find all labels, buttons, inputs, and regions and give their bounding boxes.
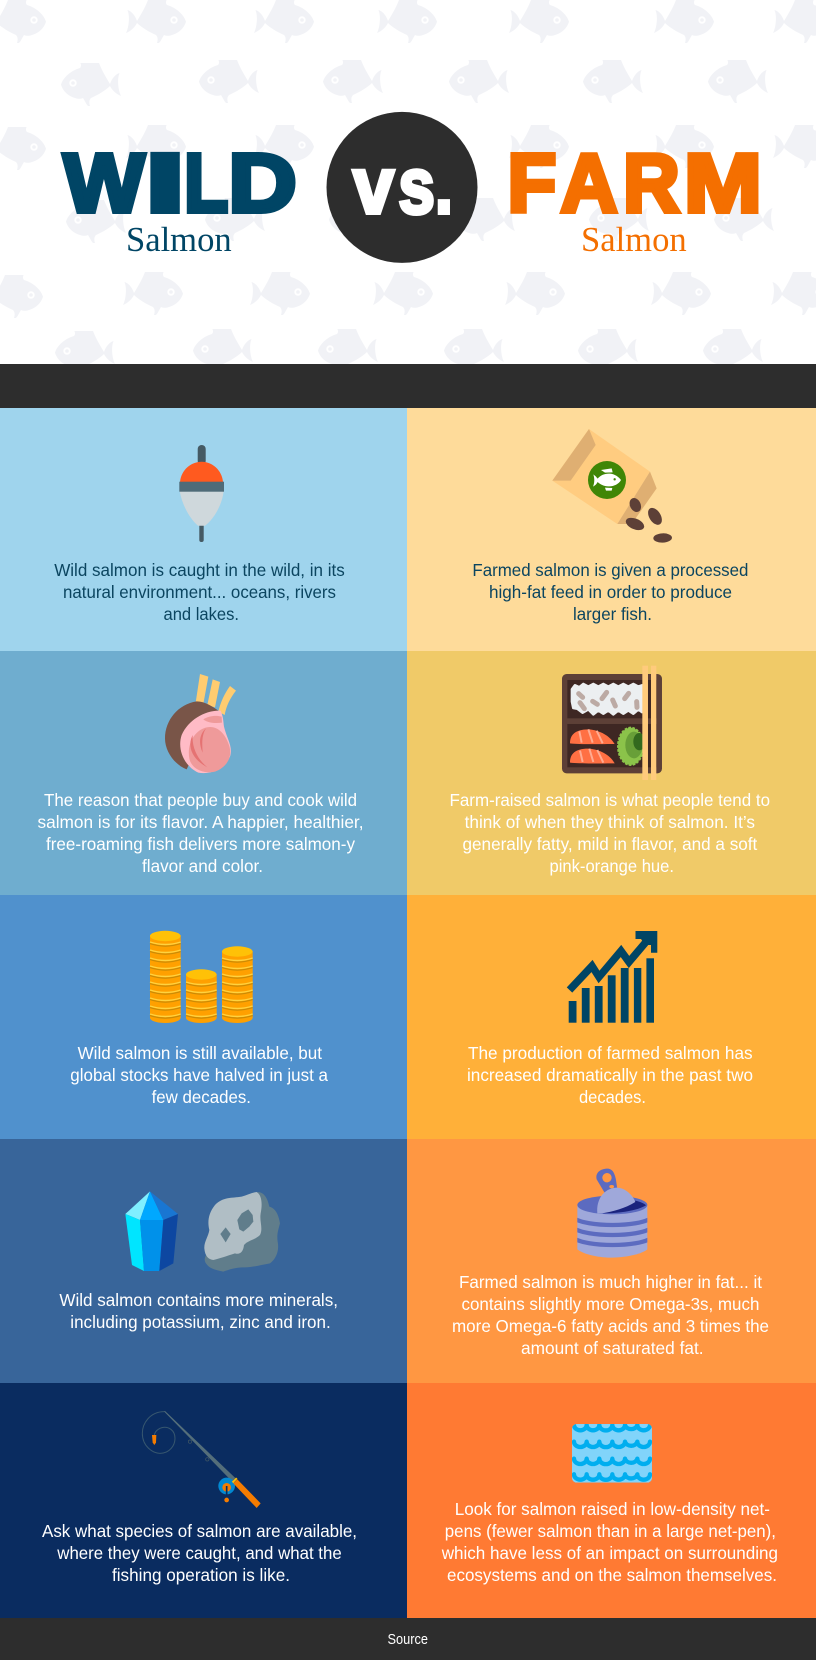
text: farm production [467,1043,753,1107]
footer: source [0,1618,816,1660]
panel: wild minerals [0,1139,407,1383]
panel: wild advice [0,1383,407,1618]
text: wild flavor: flavor and color. [142,856,263,876]
icon: rising bar chart [569,931,657,1023]
panel: wild availability [0,895,407,1139]
icon: coin stacks [150,931,253,1023]
icon: bento box [562,666,662,780]
icon: feed bag [552,429,672,543]
text: farm flavor [450,790,770,876]
text: wild minerals [59,1290,338,1332]
text: farm production: decades. [579,1087,646,1107]
dark header band [0,364,816,408]
panel: farm fat [407,1139,816,1383]
header background with fish pattern [0,0,816,374]
panel: farm production [407,895,816,1139]
panel: farm feed [407,408,816,651]
vs. circle [326,112,478,263]
icon: opened can [573,1169,651,1258]
text: wild minerals: Wild salmon contains more minerals, [59,1290,338,1310]
text: farm flavor: think of when they think of salmon. It’s [465,812,755,832]
title: WILD Salmon [64,136,297,259]
text: wild availability [70,1043,328,1107]
text: farm production: increased dramatically in the past two [467,1065,753,1085]
icon: cut of meat [165,674,236,773]
footer: source: Source [388,1632,428,1648]
text: farm advice: ecosystems and on the salmon themselves. [447,1565,777,1585]
icon: water waves [572,1424,652,1483]
text: farm feed [472,560,748,624]
text: wild flavor: The reason that people buy and cook wild [44,790,357,810]
panel: farm advice [407,1383,816,1618]
text: wild advice [42,1521,357,1585]
text: farm flavor: generally fatty, mild in flavor, and a soft [462,834,757,854]
text: farm advice: which have less of an impact on surrounding [441,1543,778,1563]
panel: wild flavor [0,651,407,895]
text: wild flavor: salmon is for its flavor. A happier, healthier, [38,812,364,832]
panel: wild caught [0,408,407,651]
vs. circle: v [353,141,394,230]
text: wild flavor [38,790,364,876]
text: wild caught: Wild salmon is caught in the wild, in its [54,560,345,580]
vs. circle: s [398,141,435,230]
text: wild minerals: including potassium, zinc and iron. [70,1312,331,1332]
text: farm advice: pens (fewer salmon than in a large net-pen), [445,1521,776,1541]
title: FARM Salmon [508,136,762,259]
text: farm production: The production of farmed salmon has [468,1043,753,1063]
text: farm fat: more Omega-6 fatty acids and 3 times the [452,1316,769,1336]
text: wild advice: fishing operation is like. [112,1565,290,1585]
text: farm fat: contains slightly more Omega-3s, much [462,1294,759,1314]
text: wild caught: natural environment... oceans, rivers [63,582,336,602]
title: FARM Salmon: A [560,136,618,230]
text: farm fat: amount of saturated fat. [521,1338,704,1358]
title: WILD Salmon: D [228,136,297,230]
text: wild advice: Ask what species of salmon are available, [42,1521,357,1541]
icon: crystal and rock [125,1191,280,1272]
title: WILD Salmon: W [64,136,145,230]
text: farm fat: Farmed salmon is much higher in fat... it [459,1272,762,1292]
text: farm feed: Farmed salmon is given a processed [472,560,748,580]
title: FARM Salmon: F [508,136,556,230]
text: wild caught: and lakes. [164,604,239,624]
title: WILD Salmon: I [145,136,185,230]
text: farm fat [452,1272,769,1358]
text: wild availability: global stocks have halved in just a [70,1065,328,1085]
text: farm advice: Look for salmon raised in low-density net- [455,1499,770,1519]
text: farm advice [441,1499,778,1585]
text: wild flavor: free-roaming fish delivers more salmon-y [46,834,355,854]
text: farm flavor: pink-orange hue. [550,856,674,876]
text: farm flavor: Farm-raised salmon is what people tend to [450,790,770,810]
icon: fishing float [179,445,224,542]
title: FARM Salmon: R [623,136,680,230]
text: wild advice: where they were caught, and what the [56,1543,342,1563]
text: farm feed: high-fat feed in order to produce [489,582,732,602]
text: wild caught [54,560,345,624]
panel: farm flavor [407,651,816,895]
title: FARM Salmon: M [684,136,762,230]
title: WILD Salmon: Salmon [126,221,232,259]
text: farm feed: larger fish. [573,604,652,624]
text: wild availability: Wild salmon is still available, but [78,1043,322,1063]
text: wild availability: few decades. [152,1087,251,1107]
vs. circle: . [435,141,453,230]
title: WILD Salmon: L [184,136,228,230]
icon: fishing rod [142,1411,261,1508]
title: FARM Salmon: Salmon [581,221,687,259]
